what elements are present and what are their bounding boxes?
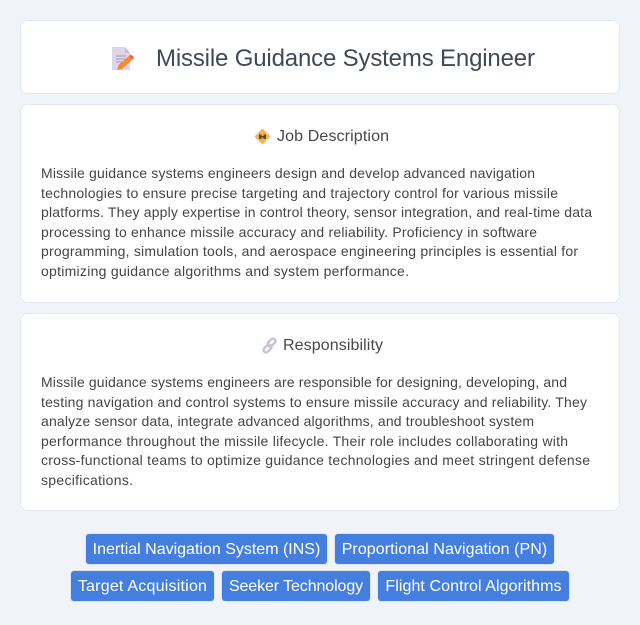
job description text: programming, simulation tools, and aerospace engineering principles is essential for <box>41 243 578 259</box>
responsibility text: testing navigation and control systems to ensure missile accuracy and reliability. They <box>41 394 587 410</box>
tags <box>70 533 570 602</box>
tag: INS <box>86 534 327 564</box>
job description text: technologies to ensure precise targeting and trajectory control for various missile <box>41 185 558 201</box>
heading: job description: Job Description <box>277 128 389 145</box>
tag: seeker technology: Seeker Technology <box>229 578 363 595</box>
panel: responsibility <box>20 313 620 511</box>
responsibility text: cross-functional teams to optimize guidance technologies and meet stringent defense <box>41 452 590 468</box>
icon: orange diamond <box>254 128 270 144</box>
tag: target acquisition <box>71 571 214 601</box>
tag: target acquisition: Target Acquisition <box>78 578 207 595</box>
job description text: processing to enhance missile accuracy and reliability. Proficiency in software <box>41 224 537 240</box>
tag: flight control algorithms <box>378 571 569 601</box>
tag: INS: Inertial Navigation System (INS) <box>93 541 320 558</box>
heading: responsibility: Responsibility <box>283 337 383 354</box>
tag: seeker technology <box>222 571 370 601</box>
tag: flight control algorithms: Flight Control Algorithms <box>385 578 562 595</box>
responsibility text <box>41 374 590 488</box>
tag: PN: Proportional Navigation (PN) <box>342 541 547 558</box>
job description text: optimizing guidance algorithms and system performance. <box>41 263 409 279</box>
panel: job description <box>20 104 620 303</box>
job description text: Missile guidance systems engineers design and develop advanced navigation <box>41 165 535 181</box>
icon: document with pencil <box>112 47 134 70</box>
responsibility text: Missile guidance systems engineers are responsible for designing, developing, and <box>41 374 567 390</box>
title: Missile Guidance Systems Engineer <box>156 45 535 72</box>
tag: PN <box>335 534 554 564</box>
job description text <box>41 165 592 279</box>
job description text: platforms. They apply expertise in control theory, sensor integration, and real-time data <box>41 204 592 220</box>
responsibility text: specifications. <box>41 472 133 488</box>
responsibility text: performance throughout the missile lifecycle. Their role includes collaborating with <box>41 433 568 449</box>
panel: title card <box>20 20 620 94</box>
responsibility text: analyze sensor data, integrate advanced algorithms, and troubleshoot system <box>41 413 534 429</box>
icon: chain link <box>262 337 277 354</box>
